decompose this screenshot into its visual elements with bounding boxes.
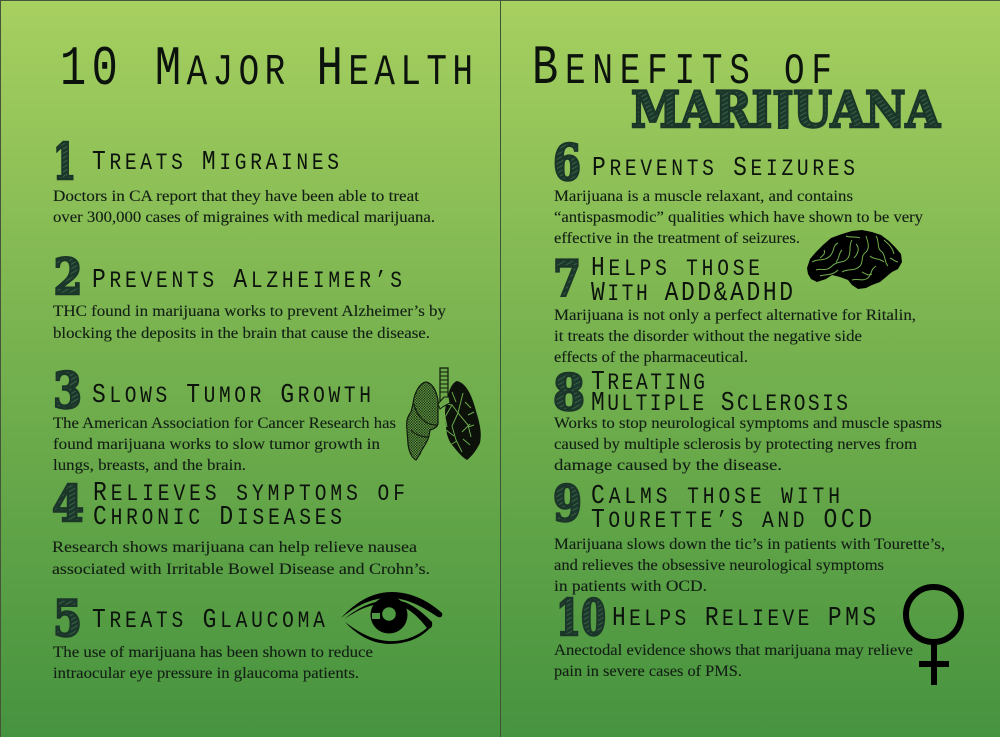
panel: item 3 slows tumor growth: found marijuana works to slow tumor growth in	[53, 435, 380, 453]
panel: item 9 calms tourette's and ocd: in patients with OCD.	[554, 577, 707, 595]
panel: item 7 helps those with add and adhd: HELPS THOSE	[591, 252, 760, 284]
panel: item 5 treats glaucoma: TREATS GLAUCOMA	[92, 604, 325, 636]
panel: item 8 treating multiple sclerosis	[553, 363, 942, 474]
panel: item 9 calms tourette's and ocd: CALMS THOSE WITH	[591, 480, 840, 512]
panel: item 4 relieves symptoms: RELIEVES SYMPTOMS OF	[93, 477, 405, 509]
panel: item 2 prevents alzheimer's: 2	[54, 247, 82, 306]
icon: venus symbol	[906, 587, 961, 685]
panel: item 2 prevents alzheimer's: PREVENTS ALZHEIMER’S	[92, 264, 402, 296]
panel: item 6 prevents seizures: 6	[553, 133, 581, 192]
panel: item 1 treats migraines	[53, 132, 435, 226]
panel: item 3 slows tumor growth	[53, 361, 396, 474]
title: right	[535, 46, 942, 129]
panel: item 3 slows tumor growth: 3	[53, 361, 82, 420]
panel: item 7 helps those with add and adhd: WITH ADD&ADHD	[591, 277, 793, 309]
panel: item 9 calms tourette's and ocd: TOURETTE’S AND OCD	[591, 504, 872, 536]
panel: item 8 treating multiple sclerosis: caused by multiple sclerosis by protecting nerves from	[554, 435, 917, 453]
panel: item 6 prevents seizures	[553, 133, 924, 247]
panel: item 3 slows tumor growth: SLOWS TUMOR GROWTH	[92, 379, 371, 411]
icon: brain	[807, 230, 902, 289]
panel: item 1 treats migraines: 1	[53, 132, 76, 191]
panel: item 5 treats glaucoma	[53, 589, 373, 682]
panel: item 8 treating multiple sclerosis: 8	[553, 363, 585, 422]
panel: item 4 relieves symptoms: Research shows marijuana can help relieve nausea	[52, 538, 417, 556]
panel: item 7 helps those with add and adhd: effects of the pharmaceutical.	[554, 348, 748, 366]
panel: item 6 prevents seizures: effective in the treatment of seizures.	[554, 229, 800, 247]
panel: item 8 treating multiple sclerosis: MULTIPLE SCLEROSIS	[591, 387, 848, 419]
title: left: 10 MAJOR HEALTH	[60, 38, 473, 102]
panel: item 6 prevents seizures: “antispasmodic” qualities which have shown to be very	[554, 208, 924, 226]
panel: item 9 calms tourette's and ocd	[553, 474, 945, 595]
panel: item 10 helps relieve pms: HELPS RELIEVE PMS	[612, 602, 876, 634]
panel: item 4 relieves symptoms: associated with Irritable Bowel Disease and Crohn’s.	[52, 560, 430, 578]
panel: item 9 calms tourette's and ocd: Marijuana slows down the tic’s in patients with Tourette’s,	[554, 535, 945, 553]
panel: item 5 treats glaucoma: intraocular eye pressure in glaucoma patients.	[53, 664, 359, 682]
panel: item 4 relieves symptoms: CHRONIC DISEASES	[93, 501, 342, 533]
panel: item 7 helps those with add and adhd: 7	[553, 249, 581, 308]
panel: item 4 relieves symptoms: 4	[52, 474, 84, 533]
panel: item 5 treats glaucoma: The use of marijuana has been shown to reduce	[53, 643, 373, 661]
icon: lungs	[407, 368, 481, 460]
panel: item 2 prevents alzheimer's: blocking the deposits in the brain that cause the disease.	[53, 324, 430, 342]
panel: item 1 treats migraines: TREATS MIGRAINES	[92, 146, 339, 178]
panel: item 10 helps relieve pms: pain in severe cases of PMS.	[554, 662, 742, 680]
panel: item 6 prevents seizures: PREVENTS SEIZURES	[592, 152, 855, 184]
panel: item 1 treats migraines: over 300,000 cases of migraines with medical marijuana.	[53, 208, 435, 226]
panel: item 1 treats migraines: Doctors in CA report that they have been able to treat	[53, 187, 420, 205]
panel: item 2 prevents alzheimer's	[53, 247, 447, 342]
panel: item 8 treating multiple sclerosis: TREATING	[591, 366, 705, 398]
panel: item 10 helps relieve pms	[554, 588, 913, 680]
panel: item 3 slows tumor growth: The American Association for Cancer Research has	[53, 414, 396, 432]
panel: item 7 helps those with add and adhd	[553, 249, 916, 366]
icon: eye	[341, 592, 442, 644]
panel: item 7 helps those with add and adhd: Marijuana is not only a perfect alternative for Ritalin,	[554, 306, 916, 324]
panel: item 6 prevents seizures: Marijuana is a muscle relaxant, and contains	[554, 187, 853, 205]
panel: item 9 calms tourette's and ocd: and relieves the obsessive neurological symptoms	[554, 556, 884, 574]
panel: item 4 relieves symptoms	[52, 474, 430, 578]
panel: item 7 helps those with add and adhd: it treats the disorder without the negative side	[554, 327, 862, 345]
panel: item 3 slows tumor growth: lungs, breasts, and the brain.	[53, 456, 246, 474]
title: right: MARIJUANA	[631, 80, 941, 139]
panel: item 8 treating multiple sclerosis: Works to stop neurological symptoms and muscle spasms	[554, 414, 942, 432]
panel: item 10 helps relieve pms: 10	[556, 588, 606, 647]
panel: item 2 prevents alzheimer's: THC found in marijuana works to prevent Alzheimer’s by	[53, 302, 447, 320]
title: right: BENEFITS OF	[532, 37, 832, 101]
panel: item 8 treating multiple sclerosis: damage caused by the disease.	[554, 456, 782, 474]
panel: item 9 calms tourette's and ocd: 9	[553, 474, 582, 533]
panel: item 10 helps relieve pms: Anectodal evidence shows that marijuana may relieve	[554, 641, 913, 659]
panel: item 5 treats glaucoma: 5	[53, 589, 82, 648]
